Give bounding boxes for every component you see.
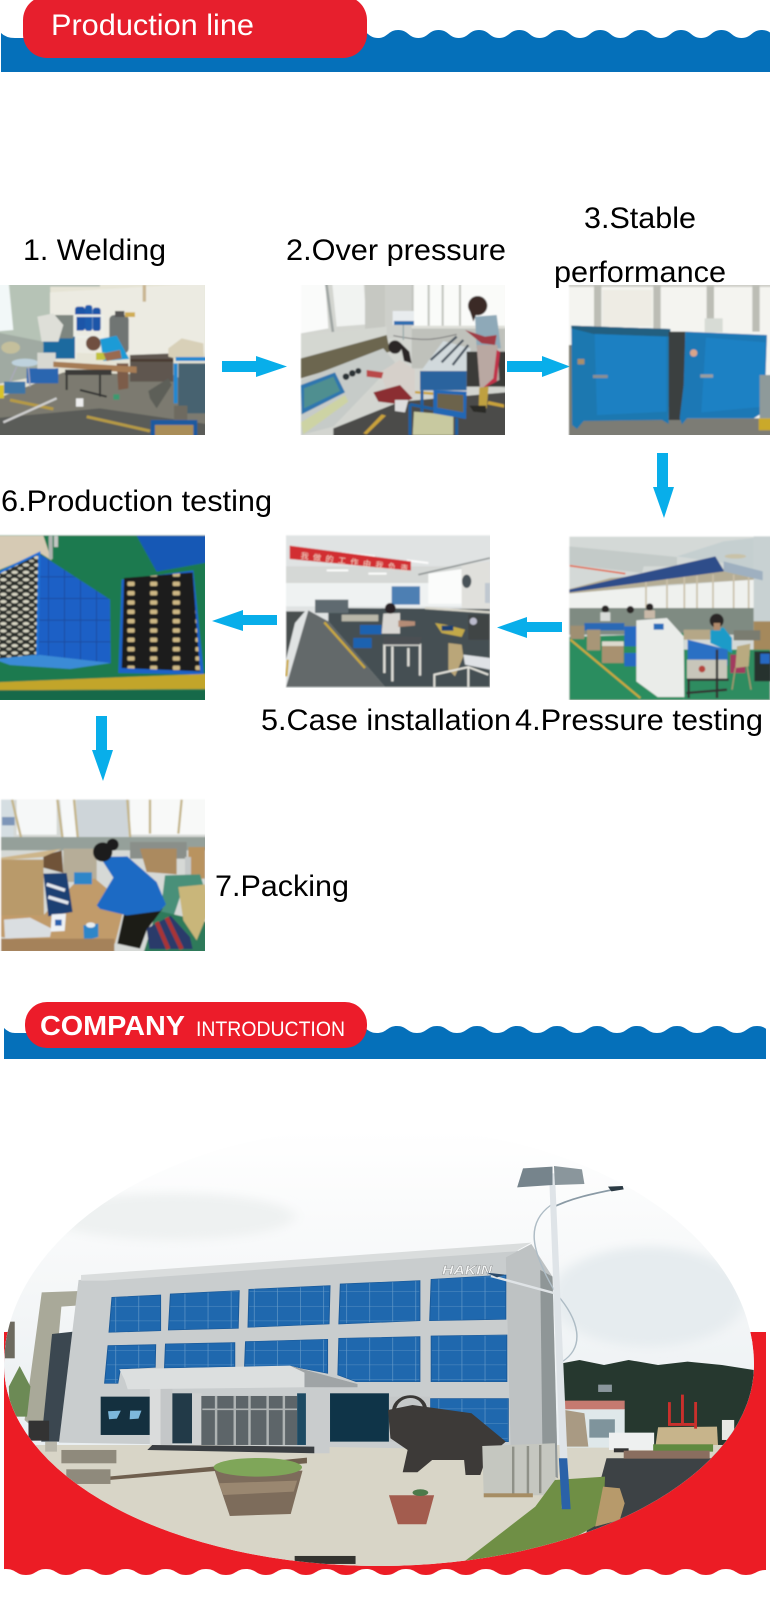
step label 2: 2.Over pressure xyxy=(286,234,506,267)
step label 3: 3.Stable xyxy=(584,202,696,235)
tree line xyxy=(562,1360,754,1458)
entrance xyxy=(101,1388,430,1453)
clay pot xyxy=(389,1489,434,1524)
stacked white boxes xyxy=(636,618,684,697)
step label 3 xyxy=(554,202,726,289)
hedge xyxy=(464,1477,605,1562)
heading: INTRODUCTION xyxy=(196,1018,345,1041)
low house xyxy=(565,1385,625,1448)
photo: production testing crates xyxy=(0,534,205,700)
HAKIN logo: HAKIN xyxy=(442,1263,493,1278)
blue overhead beam xyxy=(569,556,763,592)
seated worker xyxy=(382,603,415,634)
ground xyxy=(35,1444,723,1566)
blue wave band xyxy=(4,1026,770,1059)
photo: packing xyxy=(0,798,205,951)
red scalloped backdrop xyxy=(0,1332,766,1575)
stacked crate left xyxy=(0,553,111,669)
left oven xyxy=(571,326,670,429)
canopy xyxy=(119,1366,358,1389)
arrow: welding to over pressure xyxy=(222,356,287,377)
welder figure xyxy=(86,336,129,390)
main facade xyxy=(59,1251,518,1450)
photo: case installation workshop xyxy=(285,535,490,688)
arrow: case installation to production testing xyxy=(212,610,277,631)
step label 1: 1. Welding xyxy=(23,234,166,267)
right oven xyxy=(680,332,767,424)
side wall xyxy=(506,1244,557,1445)
red title pill xyxy=(23,0,367,58)
step label 3: performance xyxy=(554,256,726,289)
standing worker xyxy=(465,296,501,413)
chair xyxy=(178,884,208,940)
sky xyxy=(4,1192,754,1446)
window grid xyxy=(105,1275,508,1442)
arrow: over pressure to stable performance xyxy=(507,356,570,377)
blue wave band xyxy=(1,30,770,72)
planter with flowers xyxy=(214,1458,303,1516)
roof edge xyxy=(81,1243,531,1281)
step label 4: 4.Pressure testing xyxy=(515,704,763,737)
annex tower xyxy=(25,1291,80,1442)
heading: COMPANY xyxy=(40,1010,185,1041)
heading xyxy=(40,1010,345,1041)
heading: Production line xyxy=(51,9,254,42)
seated worker xyxy=(710,614,732,653)
section banner: production line xyxy=(1,0,770,72)
seated worker xyxy=(367,340,415,412)
photo: over pressure xyxy=(300,285,505,435)
arrow: pressure testing to case installation xyxy=(497,617,562,638)
sign and van: 山 xyxy=(664,1393,701,1434)
step label 6: 6.Production testing xyxy=(1,485,272,518)
open crate right xyxy=(118,570,204,675)
sign and van xyxy=(609,1393,734,1459)
step label 5: 5.Case installation xyxy=(261,704,511,737)
arrow: down to pressure testing xyxy=(653,453,674,518)
step label 7: 7.Packing xyxy=(215,870,349,903)
section banner: company introduction xyxy=(4,1002,770,1059)
red slogan banner: 我做的工作由我负责 xyxy=(300,550,409,574)
wooden fence xyxy=(595,1487,625,1527)
photo: pressure testing line xyxy=(568,536,770,700)
left tree xyxy=(5,1322,49,1441)
bull statue xyxy=(388,1397,506,1475)
packing worker xyxy=(93,839,166,949)
benches and curb xyxy=(45,1442,307,1484)
photo: welding xyxy=(0,285,205,435)
arrow: down to packing xyxy=(92,716,113,781)
photo: stable performance ovens xyxy=(568,285,770,435)
street lamp xyxy=(486,1166,624,1509)
stone pallets xyxy=(482,1443,556,1497)
photo: company building in oval mask xyxy=(4,1166,754,1566)
striped bag xyxy=(147,916,193,949)
red title pill xyxy=(25,1002,367,1048)
